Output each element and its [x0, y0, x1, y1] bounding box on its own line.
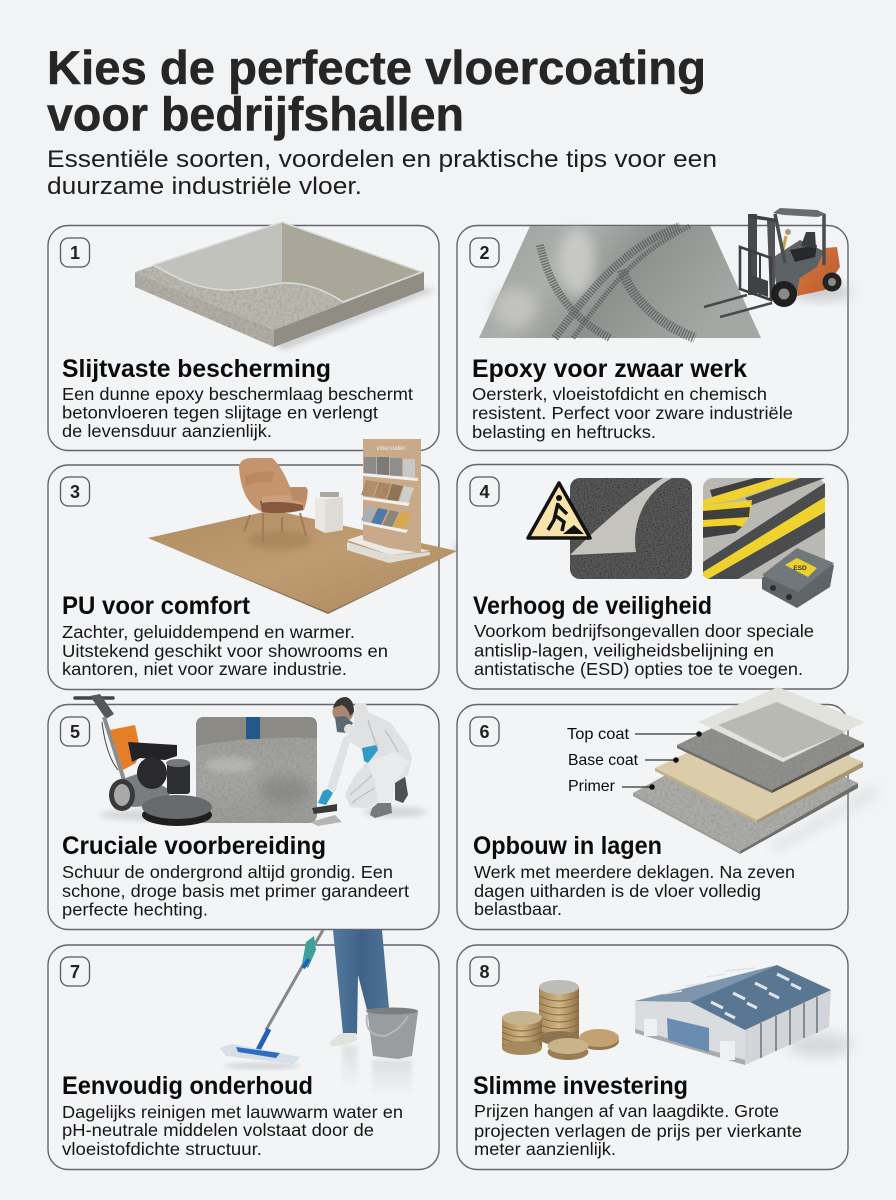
- body text: meter aanzienlijk.: [474, 1139, 616, 1159]
- heading: Slijtvaste bescherming: [62, 355, 331, 383]
- body text: Voorkom bedrijfsongevallen door speciale: [474, 621, 814, 641]
- icon: warning triangle: [528, 483, 590, 538]
- icon: number badge 1: 1: [70, 243, 80, 263]
- body text: [474, 862, 795, 919]
- body text: Werk met meerdere deklagen. Na zeven: [474, 862, 795, 882]
- body text: dagen uitharden is de vloer volledig: [474, 881, 761, 901]
- body text: resistent. Perfect voor zware industriële: [472, 403, 793, 423]
- illustration: epoxy floor with tyre tracks: [479, 226, 761, 338]
- icon: ESD box: [762, 548, 834, 608]
- body text: Prijzen hangen af van laagdikte. Grote: [474, 1101, 779, 1121]
- panel: card 6 opbouw in lagen: [457, 687, 878, 930]
- icon: number badge 3: [60, 477, 90, 506]
- body text: pH-neutrale middelen volstaat door de: [62, 1120, 374, 1140]
- panel: card 4 verhoog de veiligheid: [457, 464, 848, 689]
- illustration: orange forklift: [704, 208, 852, 317]
- icon: number badge 2: [470, 238, 499, 267]
- illustration: person mopping with bucket: [220, 930, 418, 1096]
- body text: Oersterk, vloeistofdicht en chemisch: [472, 384, 767, 404]
- panel: card 1 slijtvaste bescherming: [48, 222, 439, 450]
- title: [47, 41, 706, 140]
- illustration: concrete floor photo: [196, 717, 317, 823]
- body text: perfecte hechting.: [62, 900, 208, 920]
- body text: antislip-lagen, veiligheidsbelijning en: [474, 640, 774, 660]
- icon: number badge 4: [470, 477, 499, 506]
- heading: Opbouw in lagen: [473, 832, 662, 860]
- body text: schone, droge basis met primer garandeert: [62, 881, 409, 901]
- title: voor bedrijfshallen: [47, 88, 464, 140]
- heading: Eenvoudig onderhoud: [62, 1072, 313, 1100]
- illustration: industrial hall: [635, 965, 852, 1065]
- body text: Uitstekend geschikt voor showrooms en: [62, 641, 388, 661]
- icon: number badge 4: 4: [479, 482, 490, 502]
- label: primer: [568, 778, 655, 795]
- icon: number badge 7: 7: [70, 962, 80, 982]
- body text: belastbaar.: [474, 899, 562, 919]
- illustration: anti-slip sample: [570, 478, 692, 579]
- body text: [472, 384, 793, 442]
- icon: number badge 5: 5: [70, 722, 80, 742]
- heading: PU voor comfort: [62, 592, 251, 620]
- body text: projecten verlagen de prijs per vierkante: [474, 1121, 802, 1141]
- body text: betonvloeren tegen slijtage en verlengt: [62, 402, 378, 422]
- panel: card 7 eenvoudig onderhoud: [48, 930, 439, 1170]
- body text: kantoren, niet voor zware industrie.: [62, 659, 347, 679]
- body text: [474, 621, 814, 679]
- panel: card 3 PU voor comfort: [48, 439, 478, 690]
- icon: number badge 6: 6: [479, 722, 490, 742]
- illustration: stacked coating layers: [633, 687, 878, 854]
- icon: number badge 5: [60, 717, 90, 746]
- icon: number badge 6: [470, 717, 499, 746]
- label: top coat: [567, 726, 702, 743]
- label: primer: Primer: [568, 778, 616, 795]
- icon: number badge 2: 2: [479, 243, 490, 263]
- label: top coat: Top coat: [567, 726, 630, 743]
- body text: de levensduur aanzienlijk.: [62, 421, 272, 441]
- body text: Schuur de ondergrond altijd grondig. Een: [62, 862, 393, 882]
- illustration: PU floor with chair and sample stand: vloerstalen: [376, 446, 406, 452]
- body text: vloeistofdichte structuur.: [62, 1139, 262, 1159]
- heading: Epoxy voor zwaar werk: [472, 355, 747, 383]
- illustration: coin stacks: [502, 980, 619, 1060]
- body text: [62, 862, 409, 920]
- icon: number badge 8: [470, 957, 499, 986]
- illustration: PU floor with chair and sample stand: [148, 439, 478, 614]
- heading: Verhoog de veiligheid: [473, 592, 712, 620]
- heading: Cruciale voorbereiding: [62, 832, 326, 860]
- body text: Een dunne epoxy beschermlaag beschermt: [62, 384, 413, 404]
- body text: [474, 1101, 802, 1159]
- illustration: safety striping sample: [703, 478, 825, 579]
- illustration: concrete slab with coating: [135, 222, 436, 350]
- heading: Slimme investering: [473, 1072, 688, 1100]
- panel: card 5 cruciale voorbereiding: [48, 694, 439, 930]
- label: base coat: [568, 752, 679, 769]
- body text: Dagelijks reinigen met lauwwarm water en: [62, 1102, 403, 1122]
- body text: antistatische (ESD) opties toe te voegen.: [474, 659, 803, 679]
- body text: belasting en heftrucks.: [472, 422, 656, 442]
- subtitle: [47, 146, 717, 200]
- subtitle: Essentiële soorten, voordelen en praktische tips voor een: [47, 146, 717, 173]
- icon: number badge 8: 8: [479, 962, 490, 982]
- icon: ESD box: ESD: [793, 565, 807, 572]
- label: base coat: Base coat: [568, 752, 639, 769]
- title: Kies de perfecte vloercoating: [47, 41, 706, 94]
- panel: card 8 slimme investering: [457, 945, 852, 1170]
- icon: number badge 3: 3: [70, 482, 80, 502]
- illustration: worker in white suit: [310, 697, 427, 826]
- body text: Zachter, geluiddempend en warmer.: [62, 622, 355, 642]
- body text: [62, 622, 388, 679]
- icon: number badge 1: [60, 238, 90, 267]
- body text: [62, 384, 413, 441]
- subtitle: duurzame industriële vloer.: [47, 173, 362, 200]
- illustration: floor grinder: [75, 694, 212, 826]
- body text: [62, 1102, 403, 1159]
- icon: number badge 7: [60, 957, 90, 986]
- panel: card 2 epoxy voor zwaar werk: [457, 208, 852, 450]
